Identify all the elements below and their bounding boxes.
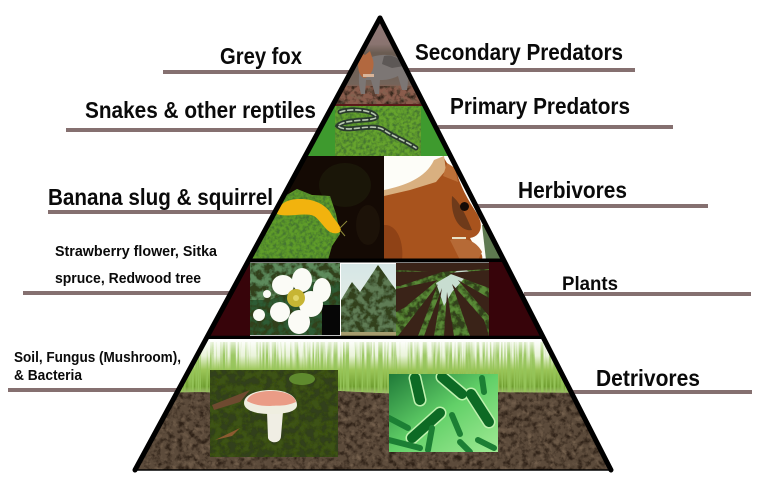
tier: plants: [200, 262, 550, 338]
leader lines: [8, 70, 752, 392]
label: Snakes & other reptiles: Snakes & other reptiles: [85, 97, 316, 123]
grass: [180, 339, 569, 394]
bacteria photo: [389, 374, 498, 452]
tier: primary predators (snake on moss photo): [308, 106, 448, 156]
label: Strawberry flower, Sitka spruce, Redwood tree: spruce, Redwood tree: [55, 270, 201, 287]
pyramid outline: [134, 18, 611, 470]
fox: [358, 51, 408, 94]
sitka spruce photo: [341, 264, 396, 337]
label: Secondary Predators: Secondary Predators: [415, 39, 623, 65]
soil: [130, 391, 620, 472]
tier divider: plants / detrivores: [200, 336, 550, 339]
tier: detrivores (grass and soil): [130, 339, 620, 472]
label: Primary Predators: Primary Predators: [450, 93, 630, 119]
mushroom photo: [210, 370, 338, 457]
label: Plants: Plants: [562, 274, 618, 295]
snake: [338, 110, 416, 148]
pyramid: [130, 18, 620, 472]
banana slug photo: [240, 156, 384, 260]
label: Strawberry flower, Sitka spruce, Redwood tree: Strawberry flower, Sitka: [55, 243, 218, 260]
strawberry flower photo: [250, 263, 340, 335]
redwood canopy photo: [396, 263, 489, 336]
label: Banana slug & squirrel: Banana slug & squirrel: [48, 184, 273, 210]
label: Soil, Fungus (Mushroom), & Bacteria: & Bacteria: [14, 367, 83, 384]
label: Soil, Fungus (Mushroom), & Bacteria: [14, 349, 181, 384]
label: Grey fox: Grey fox: [220, 43, 302, 69]
tier: secondary predators (grey fox photo): [335, 23, 422, 106]
squirrel photo: [384, 156, 510, 260]
label: Herbivores: Herbivores: [518, 177, 627, 203]
label: Soil, Fungus (Mushroom), & Bacteria: Soil, Fungus (Mushroom),: [14, 349, 181, 366]
label: Strawberry flower, Sitka spruce, Redwood tree: [55, 243, 218, 287]
tier: herbivores (slug and squirrel photos): [240, 156, 510, 260]
label: Detrivores: Detrivores: [596, 365, 700, 391]
tier divider: herbivores / plants: [240, 258, 510, 262]
maroon side panels: [205, 262, 549, 336]
